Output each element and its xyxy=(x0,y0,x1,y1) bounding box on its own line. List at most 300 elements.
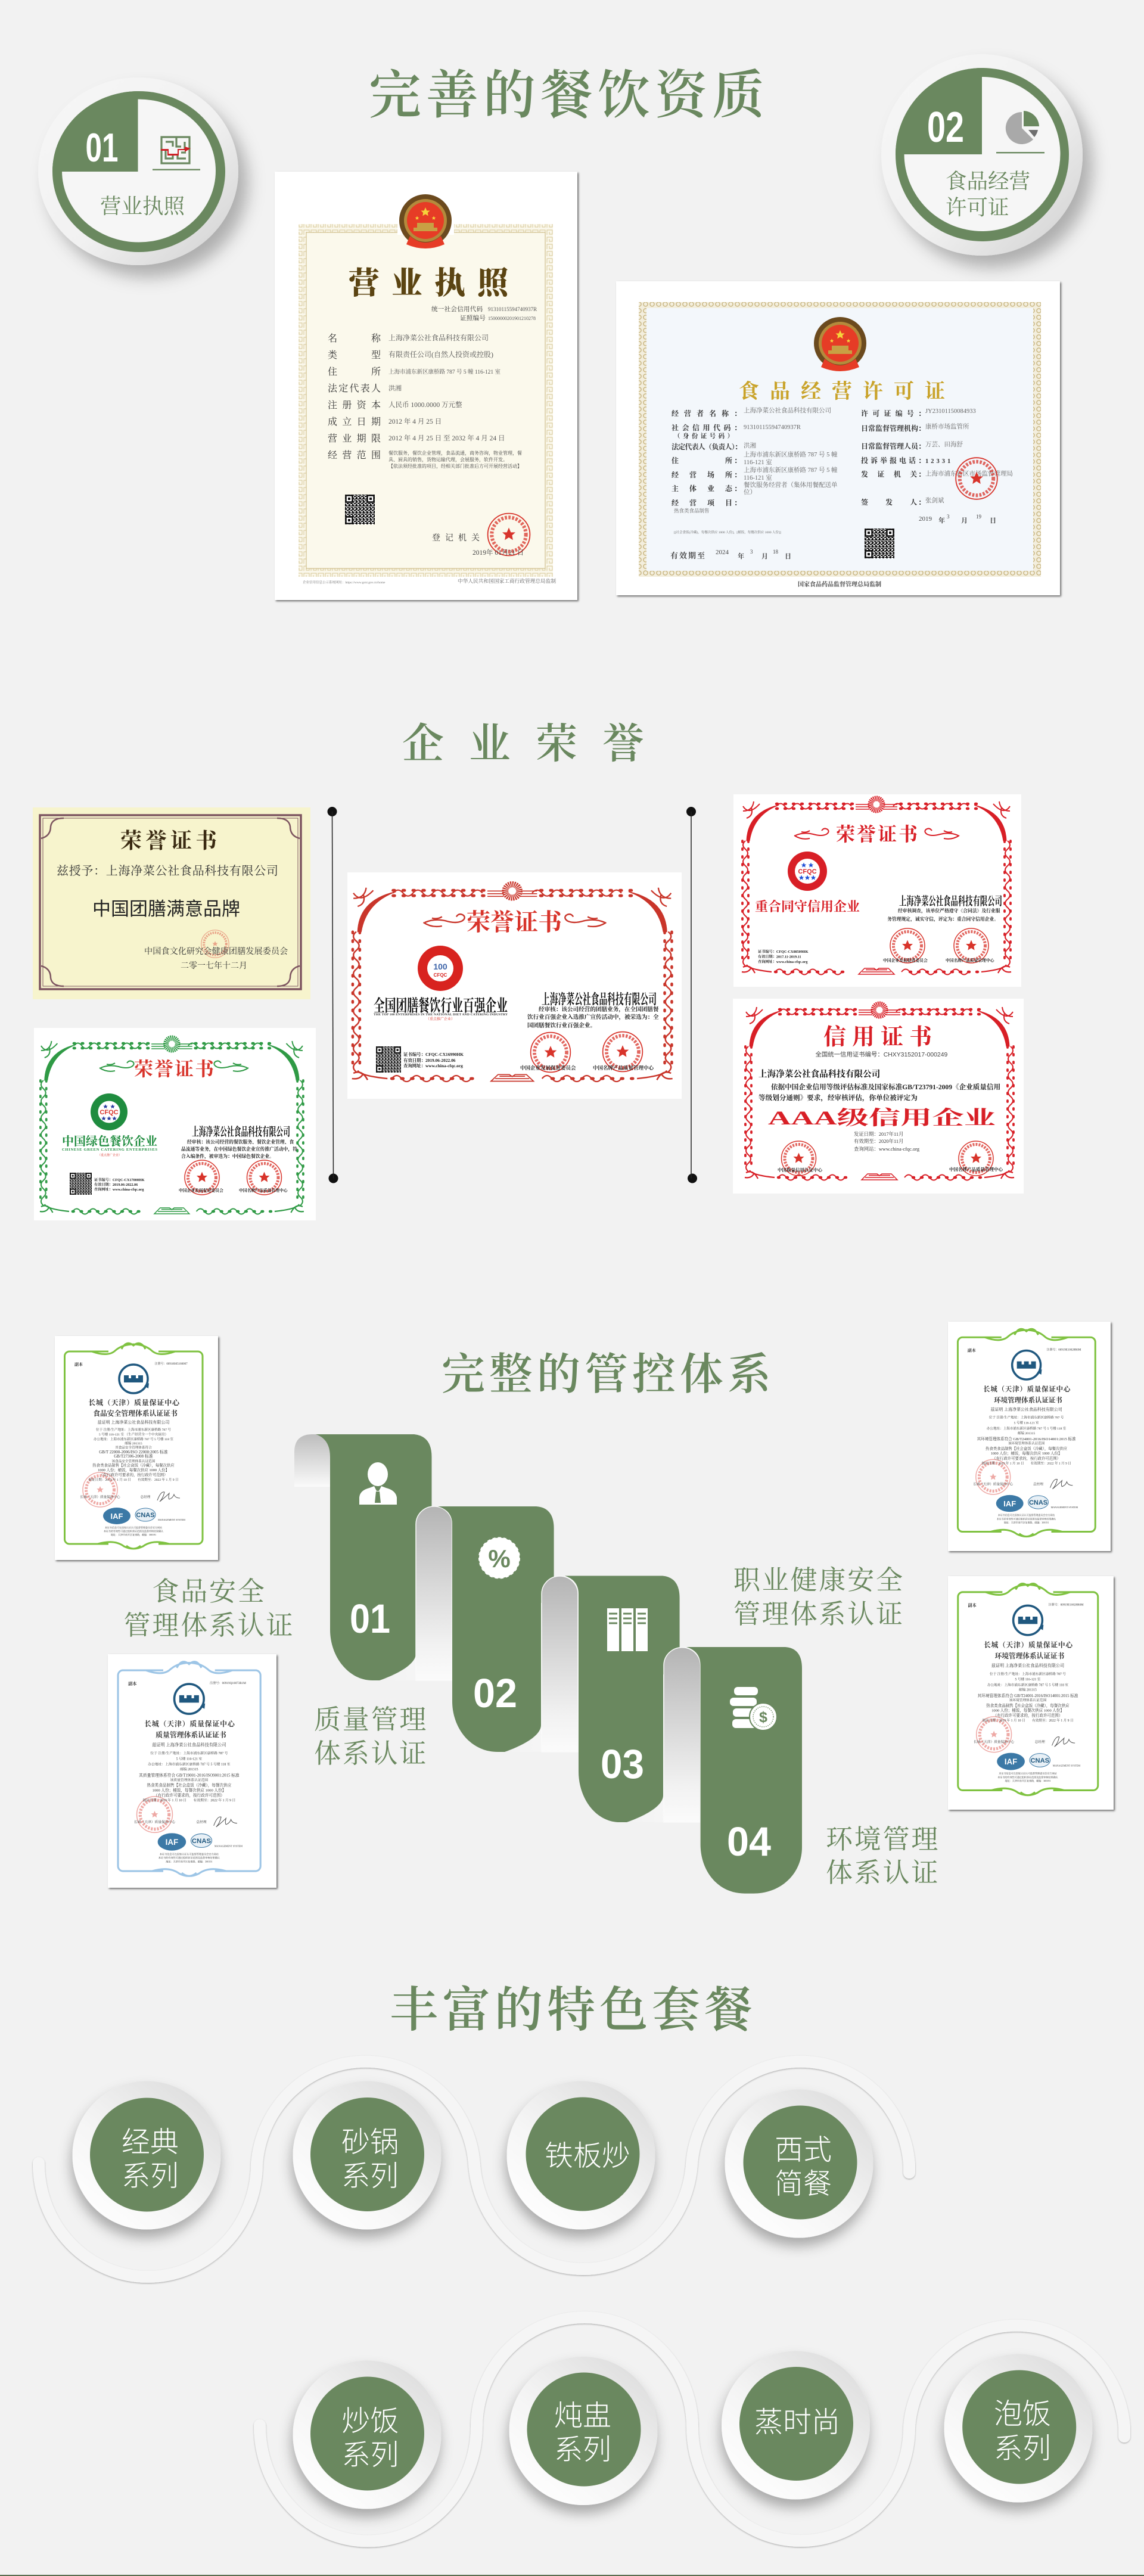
menu disc: 炒饭系列: 系列 xyxy=(341,2440,399,2471)
certificate: environmental management bottom right: 兹证明 上海净菜公社食品科技有限公司 xyxy=(991,1663,1064,1668)
certificate: food business permit: 日 xyxy=(990,517,996,524)
certificate: AAA credit: 信用证书 xyxy=(823,1025,938,1050)
certificate: food business permit: 上海市浦东新区市场监督管理局 xyxy=(925,470,1013,477)
certificate: food business permit: JY23101150084933 xyxy=(925,408,976,415)
certificate: food safety management: GB/T27306-2008 标准 xyxy=(114,1453,153,1459)
certificate: food safety management: 本证书的有效性可通过组织获证范围及监督审核结果确认 xyxy=(104,1529,163,1533)
certificate: food business permit: 住 所： xyxy=(672,456,741,465)
certificate: green catering enterprise: 证书编号：CFQC-CX17000HK xyxy=(94,1177,145,1182)
certificate: business licence: 称 xyxy=(371,333,381,344)
certificate: food business permit: 经 营 场 所： xyxy=(672,470,741,479)
menu disc: 铁板炒 xyxy=(506,2081,655,2230)
certificate: contract-honouring enterprise: 务管理规定，诚实守信，评定为：重合同守信用企业。 xyxy=(887,916,999,922)
certificate: food business permit: 年 xyxy=(738,552,744,560)
certificate: green catering enterprise: 查询网址：www.china-cfqc.org xyxy=(94,1187,144,1192)
certificate: quality management: 长城（天津）质量保证中心 xyxy=(134,1820,175,1825)
certificate: environmental management top right: 副本 xyxy=(968,1347,976,1353)
certificate: top 100 group catering: 查询网址：www.china-cfqc.org xyxy=(403,1063,463,1068)
certificate: business licence: 型 xyxy=(371,350,381,361)
certificate: AAA credit: 全国统一信用证书编号：CHXY3152017-000249 xyxy=(815,1051,947,1058)
certificate: food safety management: MANAGEMENT SYSTEM xyxy=(158,1518,185,1521)
certificate: environmental management top right: 其环境管理体系符合 GB/T24001-2016/ISO14001:2015 标准 xyxy=(977,1436,1076,1441)
label: food safety management certification: 食品安全 xyxy=(152,1577,266,1606)
logo: green CFQC seal xyxy=(91,1093,128,1130)
certificate: business licence: 餐饮服务，餐饮企业管理，食品流通，商务咨询，物业管理，餐 xyxy=(388,450,522,456)
certificate: food safety management: 长城（天津）质量保证中心 xyxy=(80,1494,120,1499)
label: environmental management certification: 体系认证 xyxy=(826,1858,940,1888)
menu disc: 经典系列: 经典 xyxy=(122,2127,179,2158)
menu disc: 泡饭系列: 泡饭 xyxy=(994,2398,1051,2430)
certificate: environmental management top right: 本证书信息可在国家认证认可监督管理委员会官方网站 xyxy=(998,1513,1055,1517)
certificate: top 100 group catering: 饮行业百强企业入选推广宣传活动中，被荣选为：全 xyxy=(527,1014,659,1021)
certificate: environmental management top right: 环境管理体系认证证书 xyxy=(994,1396,1062,1404)
logo: red 100 seal: 100 xyxy=(433,962,447,971)
certificate: food business permit xyxy=(616,281,1060,595)
certificate: cream honour: 兹授予：上海净菜公社食品科技有限公司 xyxy=(57,864,279,878)
badge 01: business licence: 营业执照 xyxy=(100,194,185,218)
certificate: food business permit: 日常监督管理人员： xyxy=(861,442,925,450)
certificate: food business permit: 张剑斌 xyxy=(925,496,944,504)
certificate: food safety management: 位于 注册/生产地址：上海市浦东新区康桥路 787 号 xyxy=(96,1427,171,1432)
certificate: green catering enterprise: 有效日期：2019.06-2022.06 xyxy=(94,1182,138,1187)
certificate: food safety management: 兹证明 上海净菜公社食品科技有限公司 xyxy=(98,1419,169,1425)
ribbon step 02 xyxy=(416,1506,578,1752)
title: 完整的管控体系: 完整的管控体系 xyxy=(442,1350,775,1399)
certificate: business licence: 企业信用信息公示系统网址：https://www.gsxt.gov.cn/home xyxy=(303,580,386,585)
badge 02: food business permit: 食品经营 xyxy=(946,169,1030,193)
certificate: contract-honouring enterprise: 重合同守信用企业 xyxy=(755,899,860,914)
icon: coins xyxy=(730,1687,777,1730)
certificate: food business permit: 3 xyxy=(750,549,753,555)
certificate: AAA credit: 发证日期：2017年11月 xyxy=(854,1131,903,1137)
certificate: food business permit: 年 xyxy=(938,516,945,524)
certificate: quality management: 本证书信息可在国家认证认可监督管理委员会官方网站 xyxy=(160,1852,219,1856)
menu disc: 西式简餐: 简餐 xyxy=(775,2168,832,2200)
certificate: food safety management: 1000 人份；桶饭，每餐次供应 1000 人份】 xyxy=(98,1467,169,1472)
badge 02: food business permit: 许可证 xyxy=(946,195,1009,219)
menu disc: 经典系列: 系列 xyxy=(122,2161,179,2192)
icon: percent badge: % xyxy=(488,1545,511,1573)
certificate: food safety management: 该食品安全管理体系认证范围 xyxy=(112,1459,156,1463)
certificate: top 100 group catering: （重点推广企业） xyxy=(426,1017,455,1021)
certificate: food safety management xyxy=(55,1336,218,1560)
certificate: cream honour xyxy=(33,807,310,999)
divider line left xyxy=(328,807,338,1183)
certificate: food business permit: 洪湘 xyxy=(744,442,756,449)
ribbon step 04: 04 xyxy=(727,1819,771,1865)
snake line row 1 xyxy=(39,2062,909,2277)
certificate: environmental management top right: 该环境管理体系认证范围 xyxy=(1008,1441,1045,1446)
certificate: contract-honouring enterprise: 查询网址：www.china-cfqc.org xyxy=(758,959,808,964)
certificate: food business permit: 康桥市场监管所 xyxy=(925,422,969,430)
certificate: quality management: 该质量管理体系认证范围 xyxy=(170,1778,208,1782)
certificate: top 100 group catering: 中国企业发展促进委员会 xyxy=(520,1065,576,1071)
certificate: business licence: 所 xyxy=(371,366,381,377)
certificate: environmental management top right: IAF xyxy=(1003,1499,1016,1508)
certificate: food safety management: 地址：天津市南开区复康路，邮编：300191 xyxy=(111,1533,156,1536)
certificate: business licence: 注册资本 xyxy=(328,400,381,411)
certificate: business licence: 营业执照 xyxy=(349,266,520,301)
certificate: AAA credit xyxy=(733,999,1024,1194)
certificate: environmental management top right: CNAS xyxy=(1029,1499,1047,1506)
certificate: top 100 group catering: 经审核：该公司经营的团膳业务，在全国团膳餐 xyxy=(539,1006,659,1013)
certificate: top 100 group catering: 全国团膳餐饮行业百强企业 xyxy=(374,996,508,1015)
ribbon step 03: 03 xyxy=(601,1741,644,1787)
certificate: quality management: 注册号：00919Q10873R1M xyxy=(210,1680,246,1685)
certificate: top 100 group catering: 荣誉证书 xyxy=(467,909,562,936)
certificate: business licence: 具、厨具的销售，货物运输代理，会展服务，软件开发。 xyxy=(388,456,508,463)
certificate: food business permit: 国家食品药品监督管理总局监制 xyxy=(798,580,881,588)
icon: binders xyxy=(607,1608,648,1651)
certificate: business licence: 经营范围 xyxy=(328,449,381,461)
certificate: environmental management bottom right: 颁证日期：2019 年 1 月 10 日 有效期至：2022 年 1 月 9 日 xyxy=(982,1718,1074,1723)
certificate: quality management: 5 号楼 116-121 室 xyxy=(176,1756,202,1761)
certificate: AAA credit: 依据中国企业信用等级评估标准及国家标准GB/T23791-2009《企业质量信用 xyxy=(771,1083,1000,1091)
certificate: cream honour: 中国团膳满意品牌 xyxy=(92,899,240,919)
certificate: business licence: 登记机关 xyxy=(432,533,484,543)
certificate: environmental management top right xyxy=(948,1322,1111,1551)
certificate: green catering enterprise: 中国绿色餐饮企业 xyxy=(62,1134,157,1148)
ribbon step 01 xyxy=(294,1434,453,1680)
certificate: business licence: 人民币 1000.0000 万元整 xyxy=(388,400,462,409)
certificate: business licence: 15000000201901210278 xyxy=(488,316,536,321)
ribbon step 04 xyxy=(664,1647,802,1894)
certificate: food business permit: 食品经营许可证 xyxy=(739,380,956,403)
ribbon step 01: 01 xyxy=(350,1596,390,1642)
menu disc: 炖盅系列: 系列 xyxy=(554,2434,611,2466)
certificate: green catering enterprise: 荣誉证书 xyxy=(134,1058,215,1080)
certificate: environmental management top right: 注册号：00919E10028R0M xyxy=(1046,1347,1081,1351)
label: quality management certification: 质量管理 xyxy=(314,1705,428,1735)
certificate: business licence: 上海市浦东新区康桥路 787 号 5 幢 116-121 室 xyxy=(388,368,501,375)
certificate: food business permit: 万芸、田海舒 xyxy=(925,440,963,448)
certificate: business licence: 2012 年 4 月 25 日 xyxy=(388,417,442,425)
menu disc: 蒸时尚 xyxy=(722,2351,870,2499)
logo: red 100 seal: CFQC xyxy=(434,972,447,978)
certificate: business licence: 洪湘 xyxy=(388,384,402,392)
certificate: environmental management bottom right: 热食类食品制售【社会盒饭（冷藏），每餐次供应 xyxy=(986,1702,1070,1708)
certificate: food business permit: 上海市浦东新区康桥路 787 号 5 幢 xyxy=(744,466,838,474)
certificate: food business permit: 投诉举报电话： xyxy=(861,456,925,465)
certificate: business licence: 2019年 01月21 日 xyxy=(472,548,524,557)
certificate: cream honour: 中国食文化研究会健康团膳发展委员会 xyxy=(144,946,288,956)
certificate: food business permit: 19 xyxy=(976,514,982,520)
badge 01: business licence xyxy=(38,77,238,265)
certificate: food business permit: 日 xyxy=(785,552,791,560)
certificate: food business permit: 位） xyxy=(744,489,756,496)
certificate: environmental management bottom right: 位于 注册/生产地址：上海市浦东新区康桥路 787 号 xyxy=(990,1671,1066,1676)
certificate: food business permit: 发 证 机 关： xyxy=(861,470,925,478)
certificate: business licence: 类 xyxy=(328,350,337,361)
certificate: food business permit: 有效期至 xyxy=(670,551,706,560)
menu disc: 砂锅系列 xyxy=(293,2081,441,2230)
certificate: food safety management: 办公地址：上海市浦东新区康桥路 787 号 5 号楼 118 室 xyxy=(94,1437,173,1441)
certificate: contract-honouring enterprise: 上海净菜公社食品科技有限公司 xyxy=(899,894,1002,908)
certificate: food business permit: 116-121 室 xyxy=(744,474,772,481)
certificate: environmental management bottom right: 本证书信息可在国家认证认可监督管理委员会官方网站 xyxy=(999,1772,1057,1775)
certificate: environmental management top right: 位于 注册/生产地址：上海市浦东新区康桥路 787 号 xyxy=(989,1415,1064,1420)
bottom edge line xyxy=(0,2575,1144,2576)
certificate: food safety management: IAF xyxy=(111,1512,123,1521)
certificate: contract-honouring enterprise: 荣誉证书 xyxy=(836,824,919,845)
certificate: cream honour: 荣誉证书 xyxy=(120,829,220,853)
certificate: food safety management: 颁证日期：2019 年 1 月 10 日 有效期至：2022 年 1 月 9 日 xyxy=(88,1477,179,1482)
certificate: top 100 group catering: 国团膳餐饮行业百强企业。 xyxy=(527,1022,596,1029)
certificate: AAA credit: 有效期至：2020年11月 xyxy=(854,1138,903,1144)
certificate: environmental management bottom right: 办公地址：上海市浦东新区康桥路 787 号 5 号楼 118 室 xyxy=(987,1682,1068,1687)
certificate: environmental management bottom right xyxy=(948,1576,1114,1810)
certificate: food business permit: 月 xyxy=(761,552,768,560)
certificate: food business permit: 上海净菜公社食品科技有限公司 xyxy=(744,406,831,414)
certificate: food business permit: 12331 xyxy=(925,458,953,465)
certificate: environmental management top right: MANAGEMENT SYSTEM xyxy=(1051,1506,1078,1509)
menu disc: 经典系列 xyxy=(73,2081,220,2230)
badge 01: business licence: 01 xyxy=(86,125,118,170)
certificate: food safety management: 本证书信息可在国家认证认可监督管理委员会官方网站 xyxy=(105,1525,162,1529)
certificate: quality management: 位于 注册/生产地址：上海市浦东新区康桥路 787 号 xyxy=(150,1751,228,1755)
certificate: contract-honouring enterprise: 中国名牌产品质量管理中心 xyxy=(946,958,995,963)
icon: pie chart xyxy=(1006,111,1039,144)
certificate: food safety management: 邮编 201315 xyxy=(125,1441,142,1446)
certificate: quality management xyxy=(108,1654,276,1888)
certificate: environmental management top right: 长城（天津）质量保证中心 xyxy=(983,1385,1071,1393)
menu disc: 炒饭系列 xyxy=(293,2361,441,2509)
certificate: food safety management: 食品安全管理体系认证证书 xyxy=(93,1409,178,1418)
certificate: environmental management bottom right: （有行政许可要求的，按行政许可范围） xyxy=(993,1713,1062,1718)
menu disc: 蒸时尚: 蒸时尚 xyxy=(754,2407,840,2438)
certificate: contract-honouring enterprise: 证书编号：CFQC-CX08509HK xyxy=(758,949,809,954)
label: quality management certification: 体系认证 xyxy=(314,1739,428,1769)
certificate: top 100 group catering xyxy=(347,872,682,1099)
certificate: green catering enterprise: CHINESE GREEN CATERING ENTERPRISES xyxy=(62,1148,157,1152)
certificate: environmental management top right: 总经理 xyxy=(1033,1482,1043,1487)
certificate: environmental management top right: 办公地址：上海市浦东新区康桥路 787 号 5 号楼 118 室 xyxy=(987,1426,1067,1431)
certificate: business licence: 法定代表人 xyxy=(328,383,381,394)
certificate: environmental management bottom right: 邮编 201315 xyxy=(1019,1688,1037,1692)
certificate: food business permit: 餐饮服务经营者（集体用餐配送单 xyxy=(744,481,838,489)
certificate: quality management: 热食类食品制售【社会盒饭（冷藏），每餐次供应 xyxy=(147,1782,232,1788)
certificate: AAA credit: 上海净菜公社食品科技有限公司 xyxy=(758,1068,880,1079)
certificate: quality management: IAF xyxy=(166,1838,178,1847)
menu disc: 炒饭系列: 炒饭 xyxy=(341,2406,399,2437)
certificate: top 100 group catering: 证书编号：CFQC-CX16990HK xyxy=(403,1052,464,1057)
certificate: food safety management: 总经理 xyxy=(141,1494,151,1499)
certificate: food safety management: GB/T 22000-2006/ISO 22000:2005 标准 xyxy=(99,1449,168,1455)
certificate: food business permit: 法定代表人（负责人）： xyxy=(672,442,742,451)
menu disc: 砂锅系列: 系列 xyxy=(341,2161,399,2192)
certificate: quality management: 邮编 201315 xyxy=(180,1767,198,1772)
certificate: environmental management top right: 1000 人份；桶饭，每餐次供应 1000 人份】 xyxy=(991,1450,1062,1456)
certificate: environmental management top right: 本证书的有效性可通过组织获证范围及监督审核结果确认 xyxy=(997,1517,1056,1520)
certificate: food safety management: CNAS xyxy=(136,1512,155,1519)
certificate: food business permit: 许可证编号： xyxy=(861,409,925,418)
certificate: business licence: 91310115594740937R xyxy=(488,306,537,312)
ribbon step 03 xyxy=(542,1576,700,1822)
certificate: cream honour: 二零一七年十二月 xyxy=(181,961,247,971)
certificate: food business permit: 月 xyxy=(961,517,968,524)
certificate: environmental management top right: 邮编 201315 xyxy=(1018,1431,1035,1435)
certificate: business licence: 名 xyxy=(328,333,337,344)
certificate: food safety management: 其食品安全管理体系符合 xyxy=(115,1445,152,1450)
label: occupational health and safety certification: 职业健康安全 xyxy=(733,1565,904,1595)
menu disc: 泡饭系列 xyxy=(944,2354,1093,2503)
certificate: environmental management bottom right: IAF xyxy=(1005,1757,1017,1766)
certificate: business licence: 住 xyxy=(328,366,337,377)
certificate: quality management: 1000 人份；桶饭，每餐次供应 1000 人份】 xyxy=(153,1787,226,1794)
certificate: contract-honouring enterprise: 经审核调查，该单位严格遵守《合同法》及行业服 xyxy=(898,908,1000,914)
certificate: environmental management bottom right: 该环境管理体系认证范围 xyxy=(1009,1698,1046,1702)
icon: maze xyxy=(161,137,191,163)
menu disc: 西式简餐 xyxy=(725,2089,873,2238)
certificate: environmental management top right: 长城（天津）质量保证中心 xyxy=(973,1482,1014,1487)
certificate: contract-honouring enterprise: 中国企业发展促进委员会 xyxy=(883,958,928,963)
certificate: quality management: 办公地址：上海市浦东新区康桥路 787 号 5 号楼 118 室 xyxy=(148,1762,231,1767)
certificate: quality management: 质量管理体系认证证书 xyxy=(156,1731,227,1739)
certificate: food business permit: [[社会食饭(冷藏)，每餐次供应 1000 人份]。[桶饭，每餐次供应 1000 人份]] xyxy=(674,530,781,535)
certificate: quality management: 总经理 xyxy=(196,1820,207,1825)
certificate: environmental management bottom right: 其环境管理体系符合 GB/T24001-2016/ISO14001:2015 标准 xyxy=(977,1693,1078,1698)
certificate: environmental management top right: 热食类食品制售【社会盒饭（冷藏），每餐次供应 xyxy=(986,1446,1068,1451)
certificate: business licence: 有限责任公司(自然人投资或控股) xyxy=(388,350,493,359)
certificate: business licence: 证照编号 xyxy=(460,314,486,322)
label: environmental management certification: 环境管理 xyxy=(826,1825,940,1854)
logo: green CFQC seal: CFQC xyxy=(100,1109,119,1116)
menu disc: 铁板炒: 铁板炒 xyxy=(545,2140,630,2172)
certificate: food business permit: 签 发 人： xyxy=(861,498,925,507)
logo: red 100 seal xyxy=(418,946,463,991)
certificate: quality management: （有行政许可要求的，按行政许可范围） xyxy=(154,1792,225,1798)
certificate: contract-honouring enterprise: 有效日期：2017.11-2019.11 xyxy=(758,955,801,959)
certificate: food business permit: 经 营 项 目： xyxy=(672,498,741,507)
title: 完善的餐饮资质: 完善的餐饮资质 xyxy=(369,67,769,125)
certificate: food business permit: 2024 xyxy=(716,549,729,556)
menu disc: 西式简餐: 西式 xyxy=(775,2134,832,2166)
certificate: environmental management bottom right: 环境管理体系认证证书 xyxy=(995,1652,1065,1660)
certificate: food business permit: 91310115594740937R xyxy=(744,424,801,431)
label: food safety management certification: 管理体系认证 xyxy=(124,1611,294,1640)
certificate: environmental management bottom right: 5 号楼 116-121 室 xyxy=(1015,1677,1041,1682)
menu disc: 砂锅系列: 砂锅 xyxy=(341,2127,399,2158)
certificate: environmental management top right: 颁证日期：2019 年 1 月 10 日 有效期至：2022 年 1 月 9 日 xyxy=(981,1461,1071,1465)
certificate: environmental management top right: 地址：天津市南开区复康路，邮编：300191 xyxy=(1004,1520,1049,1524)
certificate: food business permit: 3 xyxy=(947,514,950,520)
certificate: green catering enterprise: 合入编条件，被审选为：中国绿色餐饮企业。 xyxy=(181,1153,274,1160)
certificate: environmental management bottom right: 副本 xyxy=(968,1602,977,1608)
certificate: top 100 group catering: 中国名牌产品质量管理中心 xyxy=(593,1065,655,1071)
certificate: top 100 group catering: 上海净菜公社食品科技有限公司 xyxy=(542,992,657,1008)
certificate: environmental management bottom right: 本证书的有效性可通过组织获证范围及监督审核结果确认 xyxy=(997,1775,1058,1779)
divider line right xyxy=(686,807,697,1183)
certificate: AAA credit: 中国质量信用认证中心 xyxy=(778,1167,823,1173)
certificate: quality management: 本证书的有效性可通过组织获证范围及监督审核结果确认 xyxy=(158,1856,220,1859)
certificate: environmental management bottom right: CNAS xyxy=(1030,1757,1050,1764)
certificate: green catering enterprise: 中国名牌产品质量管理中心 xyxy=(239,1188,288,1193)
certificate: business licence xyxy=(275,172,577,600)
snake line row 2 xyxy=(260,2317,1124,2541)
certificate: quality management: 地址：天津市南开区复康路，邮编：300191 xyxy=(166,1859,213,1863)
title: 企业荣誉: 企业荣誉 xyxy=(402,722,669,767)
certificate: green catering enterprise xyxy=(34,1028,316,1220)
certificate: food safety management: 5 号楼 116-121 室 （生产经营全一个中央厨房） xyxy=(99,1432,168,1437)
icon: coins: $ xyxy=(759,1709,767,1726)
certificate: green catering enterprise: 品流通等业务，在中国绿色餐饮企业宣传推广活动中，符 xyxy=(181,1146,297,1152)
certificate: food business permit: 主 体 业 态： xyxy=(672,484,741,493)
menu disc: 炖盅系列: 炖盅 xyxy=(554,2400,611,2432)
logo: CFQC seal: CFQC xyxy=(798,868,817,875)
certificate: environmental management top right: 兹证明 上海净菜公社食品科技有限公司 xyxy=(990,1406,1062,1412)
menu disc: 炖盅系列 xyxy=(509,2357,658,2505)
certificate: AAA credit: 中国名牌产品质量管理中心 xyxy=(949,1166,1003,1172)
certificate: environmental management bottom right: 长城（天津）质量保证中心 xyxy=(984,1640,1074,1649)
certificate: top 100 group catering: THE TOP 100 ENTERPRISES IN THE NATIONAL DIET AND CATERING INDUSTRY xyxy=(374,1013,508,1017)
icon: percent badge xyxy=(479,1537,520,1578)
certificate: environmental management top right: 5 号楼 116-121 室 xyxy=(1014,1421,1039,1425)
badge 02: food business permit: 02 xyxy=(927,104,964,151)
certificate: business licence: 营业期限 xyxy=(328,433,381,444)
certificate: green catering enterprise: （重点推广企业） xyxy=(98,1153,122,1157)
certificate: green catering enterprise: 中国企业发展促进委员会 xyxy=(179,1188,223,1193)
certificate: quality management: 其质量管理体系符合 GB/T19001-2016/ISO9001:2015 标准 xyxy=(139,1772,240,1778)
certificate: business licence: 2012 年 4 月 25 日 至 2032 年 4 月 24 日 xyxy=(388,434,505,442)
label: occupational health and safety certification: 管理体系认证 xyxy=(733,1599,904,1629)
certificate: food business permit: 经营者名称： xyxy=(672,409,741,418)
certificate: food safety management: 长城（天津）质量保证中心 xyxy=(88,1398,181,1407)
logo: CFQC seal xyxy=(788,852,827,891)
certificate: quality management: 颁证日期：2019 年 1 月 10 日 有效期至：2022 年 1 月 9 日 xyxy=(142,1798,235,1803)
certificate: green catering enterprise: 经审核：该公司经营的餐饮服务、餐饮企业管理、食 xyxy=(187,1139,294,1145)
certificate: food business permit: （身份证号码） xyxy=(674,432,733,440)
certificate: business licence: 【依法须经批准的项目，经相关部门批准后方可开展经营活动】 xyxy=(388,463,522,470)
certificate: AAA credit: AAA级信用企业 xyxy=(768,1107,996,1129)
certificate: business licence: 上海净菜公社食品科技有限公司 xyxy=(388,333,489,342)
certificate: food business permit: 116-121 室 xyxy=(744,458,772,466)
certificate: AAA credit: 查询网站：www.china-cfqc.org xyxy=(854,1146,920,1152)
certificate: quality management: CNAS xyxy=(192,1838,211,1845)
certificate: quality management: 兹证明 上海净菜公社食品科技有限公司 xyxy=(152,1742,226,1747)
certificate: food business permit: 日常监督管理机构： xyxy=(861,424,925,433)
certificate: environmental management bottom right: 注册号：00919E10028R0M xyxy=(1048,1602,1084,1606)
certificate: food safety management: 热食类食品制售【社会盒饭（冷藏），每餐次供应 xyxy=(92,1462,175,1468)
certificate: food safety management: 注册号：00918S05160007 xyxy=(154,1362,188,1366)
certificate: business licence: 中华人民共和国国家工商行政管理总局监制 xyxy=(458,577,556,584)
certificate: green catering enterprise: 上海净菜公社食品科技有限公司 xyxy=(192,1125,290,1139)
certificate: environmental management bottom right: 地址：天津市南开区复康路，邮编：300191 xyxy=(1005,1779,1050,1782)
certificate: environmental management top right: （有行政许可要求的，按行政许可范围） xyxy=(992,1455,1061,1461)
certificate: food business permit: 社会信用代码： xyxy=(672,423,741,432)
certificate: quality management: 副本 xyxy=(128,1681,137,1686)
certificate: food business permit: 热食类食品制售 xyxy=(674,508,710,514)
certificate: environmental management bottom right: 总经理 xyxy=(1035,1739,1045,1744)
certificate: environmental management bottom right: 长城（天津）质量保证中心 xyxy=(974,1739,1014,1744)
title: 丰富的特色套餐: 丰富的特色套餐 xyxy=(390,1984,757,2037)
certificate: AAA credit: 等级划分通则》要求，经审核评估，你单位被评定为 xyxy=(758,1093,918,1102)
certificate: food safety management: （有行政许可要求的，按行政许可范围） xyxy=(99,1472,168,1477)
menu disc: 泡饭系列: 系列 xyxy=(994,2433,1051,2465)
certificate: food business permit: 2019 xyxy=(919,515,932,523)
icon: person xyxy=(359,1462,397,1505)
certificate: environmental management bottom right: 1000 人份；桶饭，每餐次供应 1000 人份】 xyxy=(991,1708,1064,1713)
ribbon step 02: 02 xyxy=(473,1670,517,1716)
certificate: quality management: 长城（天津）质量保证中心 xyxy=(144,1720,236,1728)
certificate: quality management: MANAGEMENT SYSTEM xyxy=(214,1844,243,1847)
certificate: food business permit: 18 xyxy=(773,549,778,555)
certificate: environmental management bottom right: MANAGEMENT SYSTEM xyxy=(1053,1764,1080,1767)
certificate: top 100 group catering: 有效日期：2019.06-2022.06 xyxy=(403,1058,456,1063)
certificate: food safety management: 副本 xyxy=(74,1362,83,1367)
certificate: food business permit: 上海市浦东新区康桥路 787 号 5 幢 xyxy=(744,450,838,458)
badge 02: food business permit xyxy=(881,54,1083,256)
certificate: business licence: 成立日期 xyxy=(328,417,381,427)
